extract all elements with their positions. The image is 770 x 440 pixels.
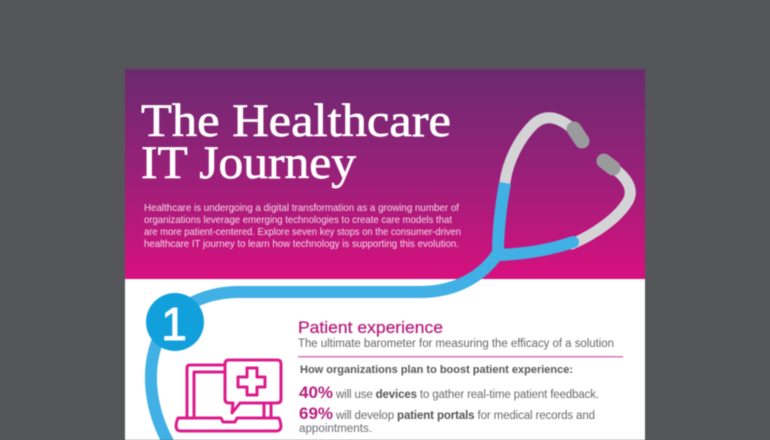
title [141, 95, 451, 189]
stat: 40 percent [299, 383, 599, 402]
stat: 69 percent: will develop patient portals for medical records and [335, 410, 595, 422]
stethoscope: blue left branch [498, 183, 505, 254]
intro paragraph: Healthcare is undergoing a digital transformation as a growing number of [144, 202, 459, 214]
stethoscope: grey right tube [572, 167, 630, 244]
title: IT Journey [141, 137, 357, 189]
title: The Healthcare [141, 95, 451, 147]
stat: 40 percent: 40% [299, 383, 333, 402]
panel: header gradient [125, 69, 645, 279]
stethoscope: blue right branch [498, 242, 573, 255]
stethoscope: grey left tube [505, 118, 574, 182]
intro paragraph: organizations leverage emerging technologies to create care models that [144, 214, 452, 226]
stethoscope: right ear tip [604, 161, 613, 168]
section heading: Patient experience [298, 319, 443, 337]
panel: white document [125, 69, 645, 440]
section subheading: The ultimate barometer for measuring the efficacy of a solution [298, 338, 614, 350]
intro paragraph: healthcare IT journey to learn how technology is supporting this evolution. [144, 238, 459, 250]
stat: 69 percent [299, 404, 595, 435]
divider [298, 356, 623, 358]
lead-in text: How organizations plan to boost patient experience: [300, 364, 573, 376]
stethoscope [151, 118, 630, 440]
stat: 40 percent: will use devices to gather real-time patient feedback. [335, 389, 599, 401]
blue tube running to step 1 [151, 253, 498, 440]
stat: 69 percent: appointments. [299, 423, 372, 435]
stethoscope: left ear tip [574, 129, 582, 141]
stat: 69 percent: 69% [299, 404, 333, 423]
intro paragraph: are more patient-centered. Explore seven key stops on the consumer-driven [144, 226, 461, 238]
step number: 1 [161, 298, 187, 350]
intro paragraph [144, 202, 461, 250]
icon: laptop with medical chat bubble [176, 360, 281, 431]
step 1 badge [146, 293, 204, 351]
